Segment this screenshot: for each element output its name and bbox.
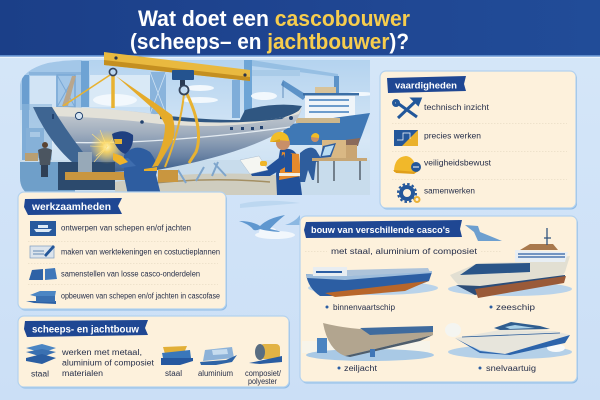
material: staal — [161, 346, 193, 378]
material: aluminium — [198, 347, 237, 378]
panel: scheeps- en jachtbouw — [18, 316, 290, 388]
material: composiet/polyester — [245, 344, 282, 386]
heading: werkzaamheden: werkzaamheden — [31, 202, 111, 213]
skill: technisch inzicht: technisch inzicht — [424, 103, 490, 112]
title: (scheeps– en jachtbouwer)? — [130, 29, 409, 54]
heading: scheeps- en jachtbouw: scheeps- en jachtbouw — [32, 324, 139, 336]
material: aluminium: aluminium — [198, 369, 233, 378]
welder — [112, 131, 161, 195]
heading: werkzaamheden — [24, 198, 122, 215]
header band — [0, 0, 600, 55]
icon: crossed tools — [394, 99, 420, 118]
background ship — [280, 87, 370, 146]
icon: drawing and pen — [30, 245, 55, 258]
welding sparks — [90, 130, 124, 164]
subtitle: met staal, aluminium of composiet — [331, 247, 478, 256]
ground — [22, 160, 52, 162]
icon: steel stack — [26, 344, 56, 364]
title: Wat doet een cascobouwer — [138, 6, 410, 31]
panel: bouw van verschillende casco's — [300, 216, 578, 384]
material: composiet/polyester: polyester — [248, 377, 277, 386]
heading: vaardigheden — [387, 76, 466, 93]
skill: precies werken: precies werken — [424, 132, 481, 140]
inspector with plans — [240, 132, 302, 195]
ship: zeiljacht: zeiljacht — [344, 364, 378, 373]
heading: bouw van verschillende casco's — [304, 220, 462, 238]
label: staal: staal — [31, 370, 49, 378]
material: composiet/polyester: composiet/ — [245, 369, 282, 378]
ship: binnenvaartschip: binnenvaartschip — [333, 303, 396, 312]
ship: snelvaartuig: snelvaartuig — [486, 364, 536, 373]
icon: gears — [398, 184, 420, 202]
title — [130, 6, 410, 54]
icon: hull parts — [29, 268, 57, 280]
description text: aluminium of composiet — [62, 358, 155, 368]
panel: vaardigheden — [380, 71, 577, 210]
stands and pallets — [58, 152, 226, 190]
skill: samenwerken: samenwerken — [424, 186, 475, 196]
icon: stacked plates — [26, 291, 56, 304]
skill: veiligheidsbewust: veiligheidsbewust — [424, 158, 492, 168]
icon: precision gauge — [394, 130, 418, 146]
task: opbeuwen: opbeuwen van schepen en/of jachten in cascofase — [61, 292, 220, 300]
task: ontwerpen: ontwerpen van schepen en/of jachten — [61, 224, 191, 232]
material: staal: staal — [165, 369, 182, 378]
clouds — [93, 85, 374, 106]
ship: zeeschip — [448, 228, 572, 312]
decorative seagull and cloud — [239, 201, 300, 239]
icon: ship design — [30, 221, 56, 236]
icon: safety helmet — [393, 156, 421, 174]
background worker left — [25, 142, 52, 177]
second worker at table — [300, 133, 367, 183]
heading: bouw van verschillende casco's: bouw van verschillende casco's — [311, 225, 450, 236]
ship: snelvaartuig — [445, 322, 572, 373]
task: samenstellen: samenstellen van losse casco-onderdelen — [61, 270, 200, 278]
ship: zeeschip: zeeschip — [496, 303, 536, 312]
ship: zeiljacht — [302, 323, 434, 373]
illustration: shipyard scene — [20, 52, 374, 195]
ship: binnenvaartschip — [306, 267, 438, 312]
lifting beam and slings — [63, 52, 250, 167]
description text: werken met metaal, — [61, 348, 142, 357]
description text — [61, 348, 155, 378]
background cranes and steel frames — [20, 60, 339, 160]
heading: scheeps- en jachtbouw — [24, 320, 148, 337]
panel: werkzaamheden — [18, 192, 227, 310]
task: werktekeningen: maken van werktekeningen en costuctieplannen — [61, 248, 220, 256]
description text: materialen — [62, 369, 103, 378]
icon: small seagull — [465, 225, 502, 241]
heading: vaardigheden: vaardigheden — [395, 80, 457, 92]
ship hull under construction — [33, 105, 302, 172]
